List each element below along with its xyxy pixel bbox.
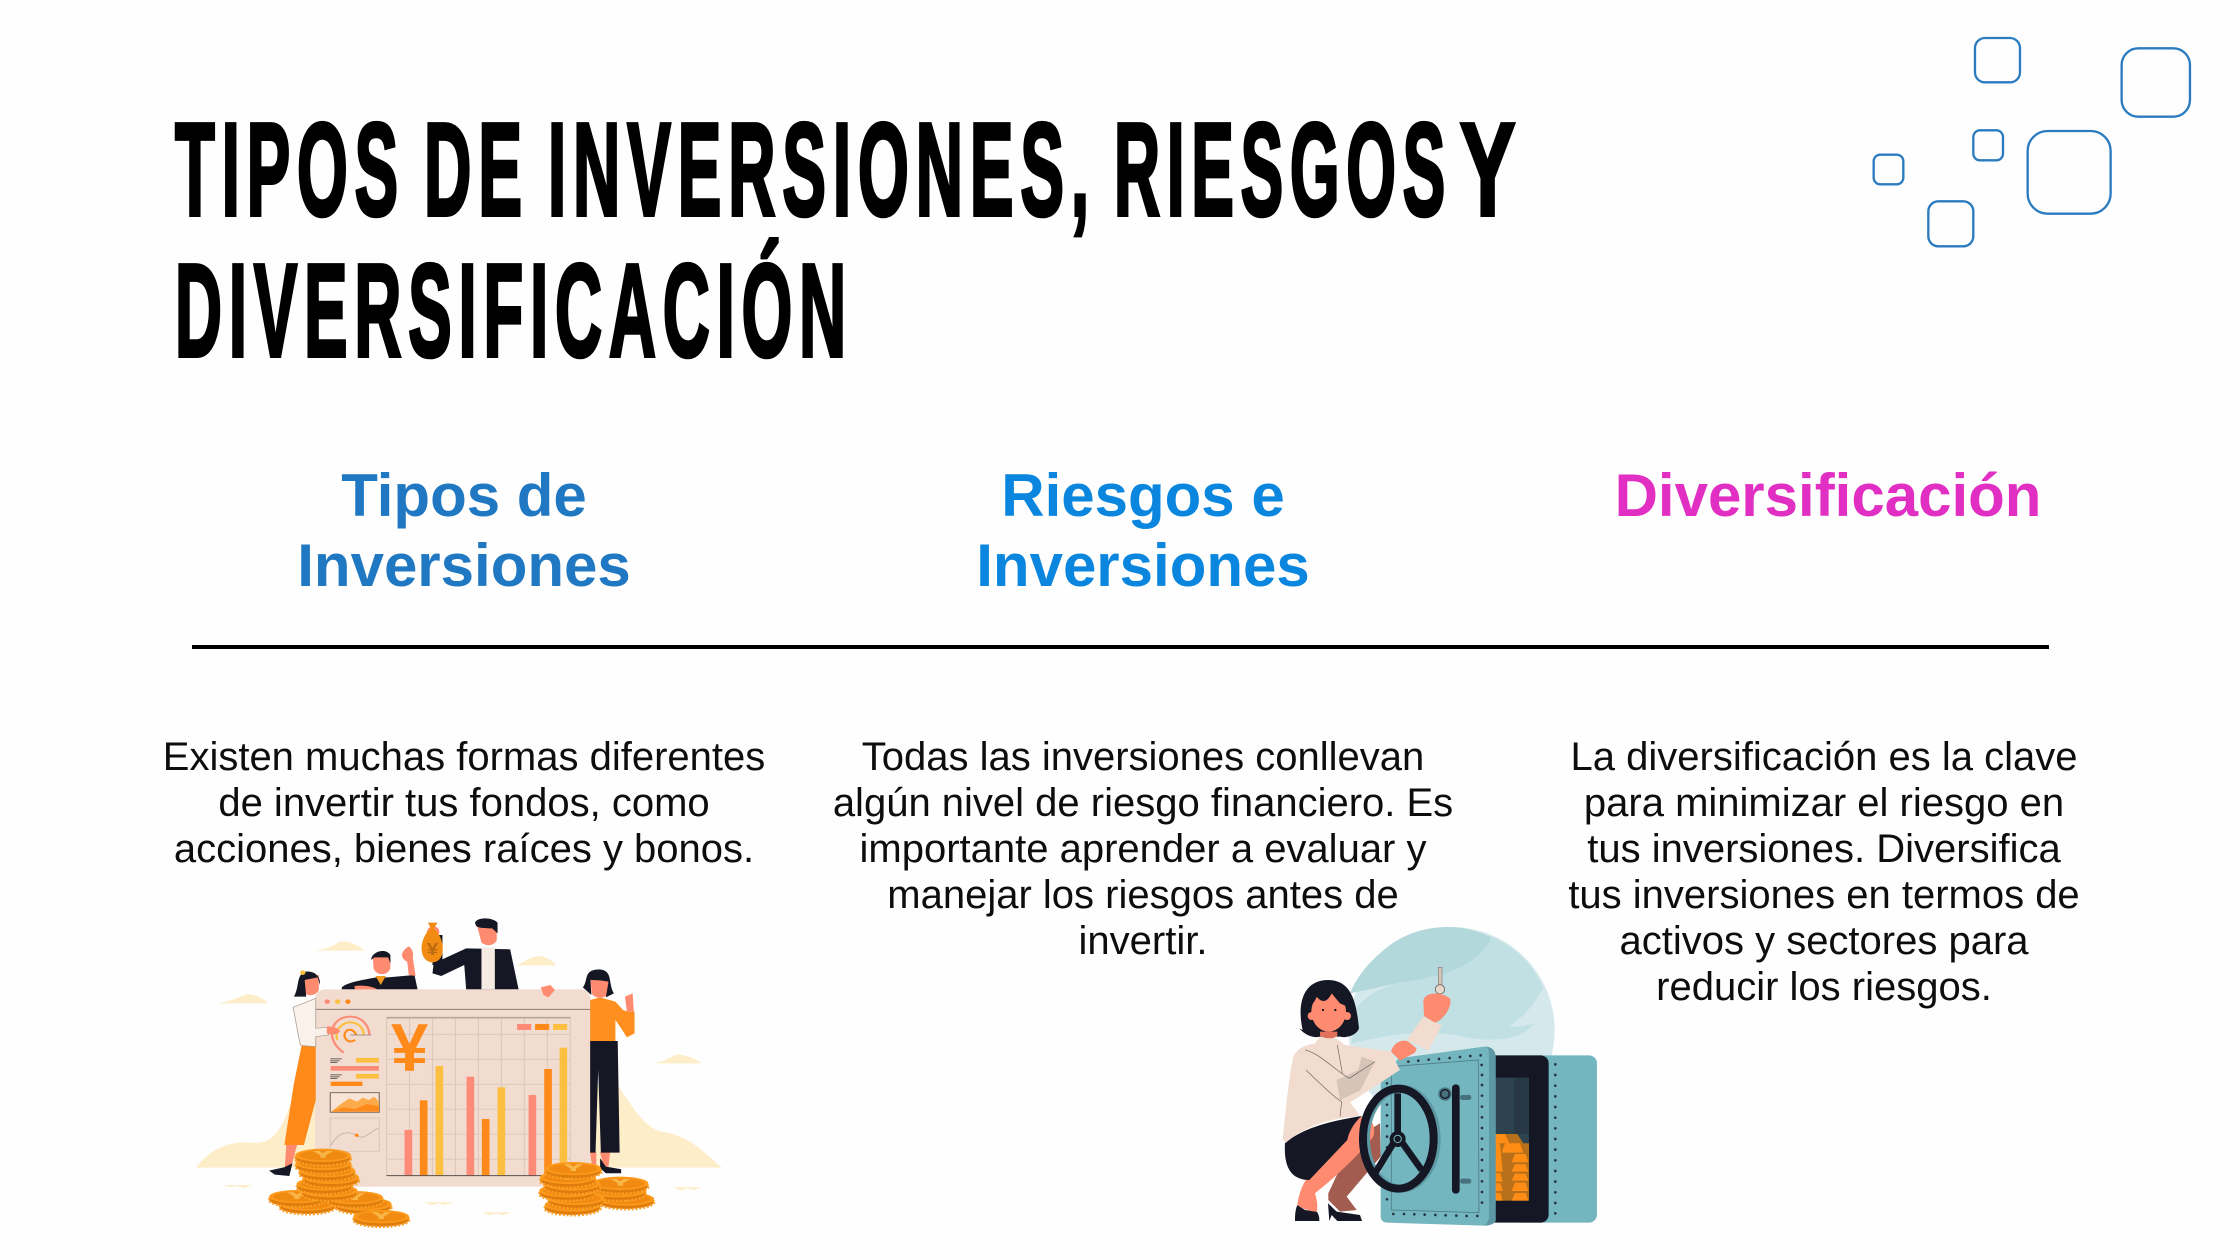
woman in orange pants bbox=[269, 970, 340, 1176]
man with mustache bbox=[342, 947, 418, 995]
heading: tipos de inversiones bbox=[297, 462, 631, 599]
teal background circle bbox=[1349, 927, 1555, 1133]
heading: riesgos e inversiones bbox=[976, 462, 1310, 599]
text block: riesgos: Todas las inversiones conllevan bbox=[862, 735, 1424, 779]
title: INVERSIONES, bbox=[548, 96, 1096, 243]
text block: diversificación: La diversificación es la clave bbox=[1571, 735, 2077, 779]
right coin stack bbox=[539, 1162, 654, 1215]
text block: tipos de inversiones: Existen muchas formas diferentes bbox=[163, 735, 765, 779]
text block: tipos de inversiones: acciones, bienes raíces y bonos. bbox=[174, 827, 754, 871]
woman in orange blouse bbox=[541, 969, 635, 1173]
text block: tipos de inversiones bbox=[163, 735, 765, 871]
title bbox=[174, 96, 1524, 384]
man with money bag bbox=[422, 918, 519, 989]
title: TIPOS bbox=[175, 96, 405, 243]
left coin stack bbox=[269, 1149, 409, 1227]
man with money bag: ¥ bbox=[427, 939, 438, 960]
small list bars bbox=[330, 1058, 379, 1086]
gauge bbox=[332, 1017, 371, 1053]
text block: riesgos: importante aprender a evaluar y bbox=[860, 827, 1426, 871]
title: DIVERSIFICACIÓN bbox=[175, 237, 853, 384]
heading: diversificación: Diversificación bbox=[1615, 462, 2041, 529]
text block: diversificación: para minimizar el riesgo en bbox=[1584, 781, 2064, 825]
text block: diversificación bbox=[1568, 735, 2080, 1009]
text block: diversificación: reducir los riesgos. bbox=[1656, 965, 1992, 1009]
safe body bbox=[1487, 1055, 1597, 1223]
dashboard board bbox=[315, 989, 591, 1187]
heading: riesgos e inversiones: Inversiones bbox=[976, 532, 1310, 599]
mini area chart bbox=[330, 1093, 379, 1112]
woman holding key bbox=[1283, 967, 1450, 1221]
text block: diversificación: tus inversiones en termos de bbox=[1568, 873, 2080, 917]
title: RIESGOS bbox=[1114, 96, 1452, 243]
heading: riesgos e inversiones: Riesgos e bbox=[1001, 462, 1285, 529]
text block: riesgos: invertir. bbox=[1079, 919, 1207, 963]
icon: yen sign: ¥ bbox=[391, 1011, 429, 1086]
mini line chart bbox=[330, 1118, 379, 1151]
background hills and clouds bbox=[196, 941, 722, 1215]
safe door bbox=[1381, 1047, 1496, 1226]
text block: tipos de inversiones: de invertir tus fondos, como bbox=[218, 781, 710, 825]
title: DE bbox=[424, 96, 529, 243]
key bbox=[1435, 967, 1445, 994]
text block: diversificación: activos y sectores para bbox=[1619, 919, 2029, 963]
text block: riesgos: algún nivel de riesgo financiero. Es bbox=[833, 781, 1453, 825]
text block: riesgos: manejar los riesgos antes de bbox=[887, 873, 1399, 917]
chart grid and bars bbox=[387, 1018, 571, 1176]
gold bars bbox=[1495, 1134, 1529, 1201]
heading: tipos de inversiones: Tipos de bbox=[341, 462, 587, 529]
heading: tipos de inversiones: Inversiones bbox=[297, 532, 631, 599]
title: Y bbox=[1460, 96, 1524, 243]
divider line bbox=[192, 645, 2048, 649]
text block: riesgos bbox=[833, 735, 1453, 963]
text block: diversificación: tus inversiones. Diversifica bbox=[1587, 827, 2061, 871]
safe wheel bbox=[1363, 1089, 1437, 1189]
